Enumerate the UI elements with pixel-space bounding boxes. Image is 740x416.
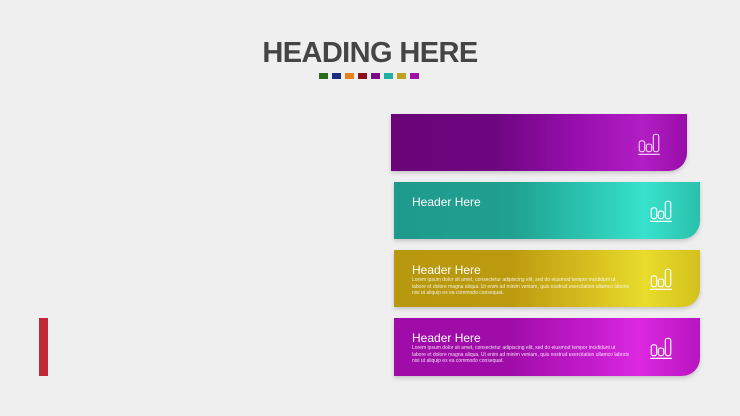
banner 1 purple xyxy=(391,114,687,171)
icon: bar chart xyxy=(650,200,672,222)
banner 2 teal xyxy=(394,182,700,239)
red accent bar xyxy=(39,318,48,376)
header text: Header Here xyxy=(412,195,481,209)
header text: Header Here xyxy=(412,263,481,277)
color legend squares xyxy=(319,73,419,79)
banner 3 gold xyxy=(394,250,700,307)
banner 4 magenta xyxy=(394,318,700,376)
icon: bar chart xyxy=(650,268,672,290)
body text: Lorem ipsum dolor sit amet, consectetur adipiscing elit, sed do eiusmod tempor incididunt ut labore et dolore magna aliqua. Ut enim ad minim veniam, quis nostrud exercitation ullamco laboris nisi ut aliquip ex ea commodo consequat. xyxy=(412,277,629,296)
body text: Lorem ipsum dolor sit amet, consectetur adipiscing elit, sed do eiusmod tempor incididunt ut labore et dolore magna aliqua. Ut enim ad minim veniam, quis nostrud exercitation ullamco laboris nisi ut aliquip ex ea commodo consequat. xyxy=(412,345,629,364)
icon: bar chart xyxy=(650,338,672,359)
header text: Header Here xyxy=(412,331,481,345)
icon: bar chart xyxy=(638,134,660,155)
title: HEADING HERE xyxy=(262,37,478,69)
